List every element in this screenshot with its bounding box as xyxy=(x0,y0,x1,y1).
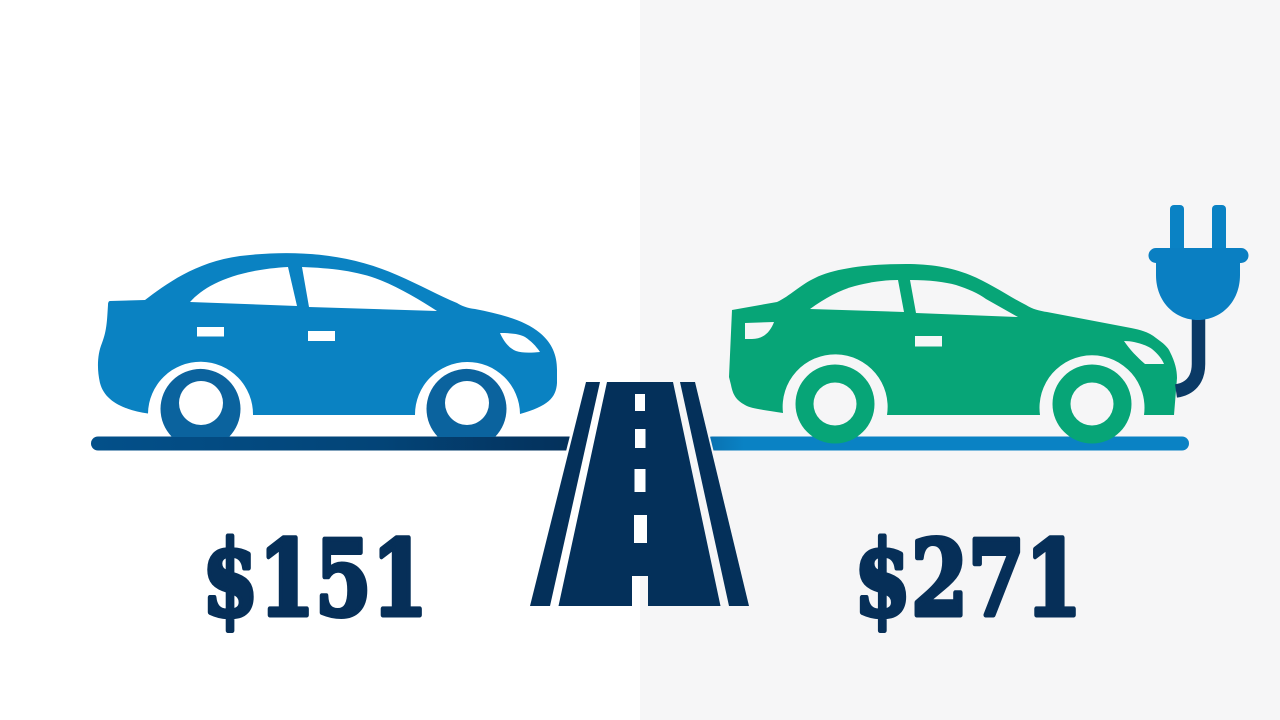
white gap around road xyxy=(526,380,640,610)
front window xyxy=(910,280,1018,317)
plug prong left xyxy=(1170,205,1184,255)
tail light xyxy=(745,322,774,339)
rear wheel xyxy=(160,369,240,437)
plug prong right xyxy=(1212,205,1226,255)
cost label: gasoline car: $151 xyxy=(202,517,428,640)
white gap around road right xyxy=(640,380,753,610)
icon: green electric car xyxy=(729,264,1177,444)
front wheel xyxy=(1052,364,1132,444)
car body xyxy=(98,253,557,415)
front window xyxy=(302,267,437,311)
road surface xyxy=(558,382,720,606)
cost label: electric car: $271 xyxy=(854,517,1082,640)
door handle front xyxy=(308,331,335,341)
road line: right xyxy=(705,436,1189,450)
headlight xyxy=(1124,341,1164,364)
lane dash 2 xyxy=(635,429,646,448)
left shoulder xyxy=(530,382,600,606)
rear window xyxy=(810,280,904,312)
lane dash 4 xyxy=(634,515,647,543)
lane dash 1 xyxy=(635,394,645,411)
icon: highway xyxy=(526,380,753,610)
rear window xyxy=(190,267,297,306)
plug cord xyxy=(1176,318,1198,391)
headlight xyxy=(500,333,540,353)
panel: right background xyxy=(640,0,1280,720)
road line: left xyxy=(91,436,576,450)
icon: electric plug xyxy=(1149,205,1248,391)
door handle xyxy=(915,336,942,346)
front wheel xyxy=(426,369,507,437)
lane dash 3 xyxy=(634,469,646,492)
right shoulder xyxy=(680,382,749,606)
plug head xyxy=(1149,248,1248,320)
rear wheel xyxy=(796,364,874,444)
icon: blue gasoline car xyxy=(98,253,557,437)
door handle rear xyxy=(197,327,224,336)
car body xyxy=(729,264,1177,415)
